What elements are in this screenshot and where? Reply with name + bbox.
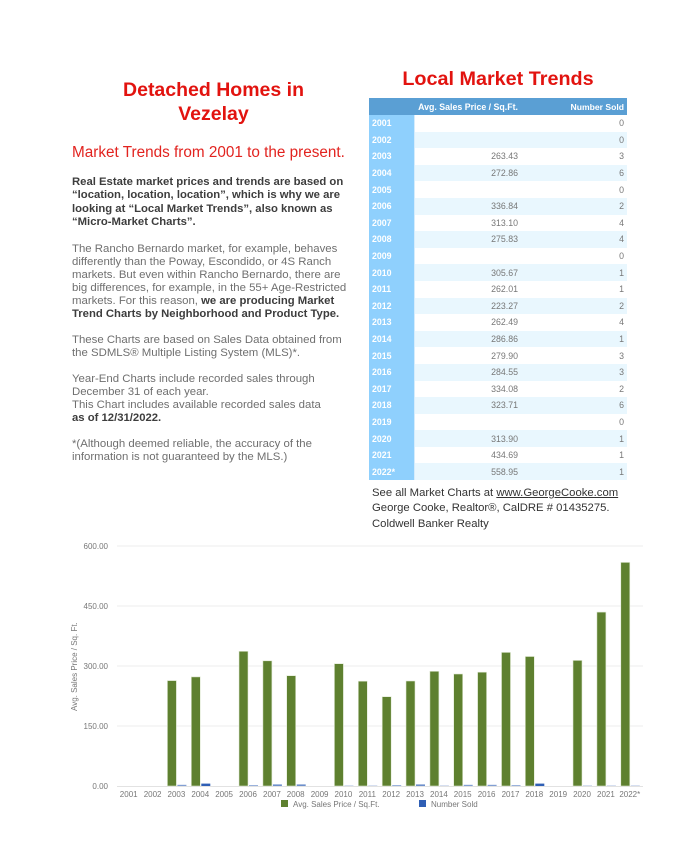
text block: year-end note: This Chart includes available recorded sales data bbox=[72, 399, 321, 411]
x axis labels: 2003 bbox=[168, 790, 186, 799]
data table: market trends by year: 286.86 bbox=[491, 334, 518, 344]
text block: data source bbox=[72, 334, 342, 359]
data table: market trends by year: 263.43 bbox=[491, 151, 518, 161]
text block: data source: the SDMLS® Multiple Listing System (MLS)*. bbox=[72, 347, 300, 359]
text block: year-end note: as of 12/31/2022. bbox=[72, 412, 161, 424]
legend: Number Sold bbox=[431, 800, 478, 809]
y axis labels bbox=[84, 542, 109, 791]
text block: contact information: George Cooke, Realtor®, CalDRE # 01435275. bbox=[372, 502, 610, 514]
data table: market trends by year: 2014 bbox=[372, 334, 392, 344]
text block: Rancho Bernardo explanation: big differences, for example, in the 55+ Age-Restricted bbox=[72, 282, 346, 294]
data table: market trends by year: 2002 bbox=[372, 135, 392, 145]
data table: market trends by year: 334.08 bbox=[491, 384, 518, 394]
data table: market trends by year: 2003 bbox=[372, 151, 392, 161]
x axis labels: 2016 bbox=[478, 790, 496, 799]
data table: market trends by year: 2017 bbox=[372, 384, 392, 394]
x axis labels: 2011 bbox=[359, 790, 376, 799]
number sold bars bbox=[177, 784, 640, 786]
data table: market trends by year: 4 bbox=[619, 234, 624, 244]
y axis labels: 600.00 bbox=[84, 542, 109, 551]
data table: market trends by year: 2013 bbox=[372, 317, 392, 327]
title: Detached Homes in Vezelay bbox=[123, 79, 304, 125]
x axis labels bbox=[120, 790, 640, 799]
data table: market trends by year: 3 bbox=[619, 367, 624, 377]
data table: market trends by year: 313.90 bbox=[491, 434, 518, 444]
title: Detached Homes in Vezelay: Vezelay bbox=[178, 103, 249, 125]
text block: introduction: “location, location, location”, which is why we are bbox=[72, 189, 340, 201]
data table: market trends by year: 272.86 bbox=[491, 168, 518, 178]
data table: market trends by year: 1 bbox=[619, 434, 624, 444]
text block: year-end note: Year-End Charts include recorded sales through bbox=[72, 372, 315, 384]
data table: market trends by year: 4 bbox=[619, 218, 624, 228]
data table: market trends by year: 2005 bbox=[372, 185, 392, 195]
x axis labels: 2018 bbox=[525, 790, 544, 799]
data table: market trends by year: 2015 bbox=[372, 351, 392, 361]
data table: market trends by year: 0 bbox=[619, 417, 624, 427]
data table: market trends by year: 2019 bbox=[372, 417, 392, 427]
data table: market trends by year: 2011 bbox=[372, 284, 391, 294]
data table: market trends by year: 1 bbox=[619, 467, 624, 477]
text block: contact information: See all Market Charts at www.GeorgeCooke.com bbox=[372, 487, 618, 499]
data table: market trends by year: 1 bbox=[619, 334, 624, 344]
x axis labels: 2013 bbox=[406, 790, 424, 799]
data table: market trends by year: 279.90 bbox=[491, 351, 518, 361]
text block: year-end note bbox=[72, 372, 321, 424]
data table: market trends by year: 262.49 bbox=[491, 317, 518, 327]
text block: disclaimer: information is not guaranteed by the MLS.) bbox=[72, 451, 287, 463]
text block: introduction: Real Estate market prices and trends are based on bbox=[72, 176, 343, 188]
text block: introduction: looking at “Local Market Trends”, also known as bbox=[72, 203, 333, 215]
data table: market trends by year: 0 bbox=[619, 185, 624, 195]
x axis labels: 2005 bbox=[215, 790, 234, 799]
data table: market trends by year: 2009 bbox=[372, 251, 392, 261]
data table: market trends by year: 2018 bbox=[372, 400, 392, 410]
data table: market trends by year: 6 bbox=[619, 168, 624, 178]
y axis title: Avg. Sales Price / Sq. Ft. bbox=[70, 622, 79, 711]
data table: market trends by year: 323.71 bbox=[491, 400, 518, 410]
data table: market trends by year: 0 bbox=[619, 118, 624, 128]
text block: Rancho Bernardo explanation bbox=[72, 242, 346, 320]
text block: introduction bbox=[72, 176, 343, 228]
text block: Rancho Bernardo explanation: markets. But even within Rancho Bernardo, there are bbox=[72, 269, 340, 281]
text block: Rancho Bernardo explanation: markets. For this reason, we are producing Market bbox=[72, 295, 334, 307]
x axis labels: 2001 bbox=[120, 790, 138, 799]
y axis labels: 300.00 bbox=[84, 662, 109, 671]
x axis labels: 2006 bbox=[239, 790, 257, 799]
data table: market trends by year: 2007 bbox=[372, 218, 392, 228]
data table: market trends by year: 275.83 bbox=[491, 234, 518, 244]
data table: market trends by year: Number Sold bbox=[571, 102, 624, 112]
x axis labels: 2010 bbox=[335, 790, 353, 799]
text block: year-end note: December 31 of each year. bbox=[72, 386, 209, 398]
data table: market trends by year: 305.67 bbox=[491, 268, 518, 278]
data table: market trends by year: 223.27 bbox=[491, 301, 518, 311]
data table: market trends by year: 2006 bbox=[372, 201, 392, 211]
legend: Avg. Sales Price / Sq.Ft. bbox=[293, 800, 380, 809]
x axis labels: 2004 bbox=[191, 790, 210, 799]
x axis labels: 2015 bbox=[454, 790, 472, 799]
text block: Rancho Bernardo explanation: Trend Charts by Neighborhood and Product Type. bbox=[72, 308, 339, 320]
data table: market trends by year: 262.01 bbox=[491, 284, 518, 294]
data table: market trends by year: 1 bbox=[619, 450, 624, 460]
data table: market trends by year: 2012 bbox=[372, 301, 392, 311]
x axis labels: 2009 bbox=[311, 790, 329, 799]
data table: market trends by year: 0 bbox=[619, 135, 624, 145]
data table: market trends by year: 336.84 bbox=[491, 201, 518, 211]
price bars bbox=[167, 562, 630, 786]
y axis labels: 150.00 bbox=[84, 722, 109, 731]
text block: disclaimer: *(Although deemed reliable, the accuracy of the bbox=[72, 438, 312, 450]
title: Detached Homes in Vezelay: Detached Homes in bbox=[123, 79, 304, 101]
data table: market trends by year: 2 bbox=[619, 301, 624, 311]
data table: market trends by year: 284.55 bbox=[491, 367, 518, 377]
data table: market trends by year: 2008 bbox=[372, 234, 392, 244]
x axis labels: 2008 bbox=[287, 790, 305, 799]
x axis labels: 2012 bbox=[382, 790, 401, 799]
x axis labels: 2022* bbox=[619, 790, 640, 799]
data table: market trends by year: 2022* bbox=[372, 467, 395, 477]
text block: contact information: Coldwell Banker Realty bbox=[372, 518, 489, 530]
text block: disclaimer bbox=[72, 438, 312, 463]
x axis labels: 2007 bbox=[263, 790, 281, 799]
x axis labels: 2002 bbox=[144, 790, 162, 799]
x axis labels: 2014 bbox=[430, 790, 448, 799]
text block: contact information bbox=[372, 487, 618, 530]
data table: market trends by year: Avg. Sales Price / Sq.Ft. bbox=[418, 102, 518, 112]
y axis labels: 450.00 bbox=[84, 602, 109, 611]
text block: Rancho Bernardo explanation: differently than the Poway, Escondido, or 4S Ranch bbox=[72, 256, 331, 268]
y axis labels: 0.00 bbox=[92, 782, 109, 791]
subtitle: market trends: Market Trends from 2001 to the present. bbox=[72, 144, 345, 161]
data table: market trends by year: 3 bbox=[619, 351, 624, 361]
data table: market trends by year: 1 bbox=[619, 284, 624, 294]
data table: market trends by year: 558.95 bbox=[491, 467, 518, 477]
data table: market trends by year: 2016 bbox=[372, 367, 392, 377]
data table: market trends by year: 0 bbox=[619, 251, 624, 261]
data table: market trends by year: 313.10 bbox=[491, 218, 518, 228]
data table: market trends by year: 1 bbox=[619, 268, 624, 278]
x axis labels: 2021 bbox=[597, 790, 615, 799]
data table: market trends by year: 2020 bbox=[372, 434, 392, 444]
x axis labels: 2017 bbox=[502, 790, 520, 799]
data table: market trends by year: 4 bbox=[619, 317, 624, 327]
data table: market trends by year: 2021 bbox=[372, 450, 392, 460]
data table: market trends by year bbox=[369, 98, 627, 480]
data table: market trends by year: 434.69 bbox=[491, 450, 518, 460]
x axis labels: 2019 bbox=[549, 790, 568, 799]
heading: Local Market Trends: Local Market Trends bbox=[402, 68, 594, 90]
data table: market trends by year: 6 bbox=[619, 400, 624, 410]
data table: market trends by year: 3 bbox=[619, 151, 624, 161]
data table: market trends by year: 2004 bbox=[372, 168, 392, 178]
data table: market trends by year: 2 bbox=[619, 384, 624, 394]
text block: Rancho Bernardo explanation: The Rancho Bernardo market, for example, behaves bbox=[72, 242, 337, 254]
x axis labels: 2020 bbox=[573, 790, 591, 799]
legend bbox=[281, 800, 478, 809]
text block: data source: These Charts are based on Sales Data obtained from bbox=[72, 334, 342, 346]
data table: market trends by year: 2010 bbox=[372, 268, 392, 278]
data table: market trends by year: 2001 bbox=[372, 118, 392, 128]
text block: introduction: “Micro-Market Charts”. bbox=[72, 216, 196, 228]
data table: market trends by year: 2 bbox=[619, 201, 624, 211]
